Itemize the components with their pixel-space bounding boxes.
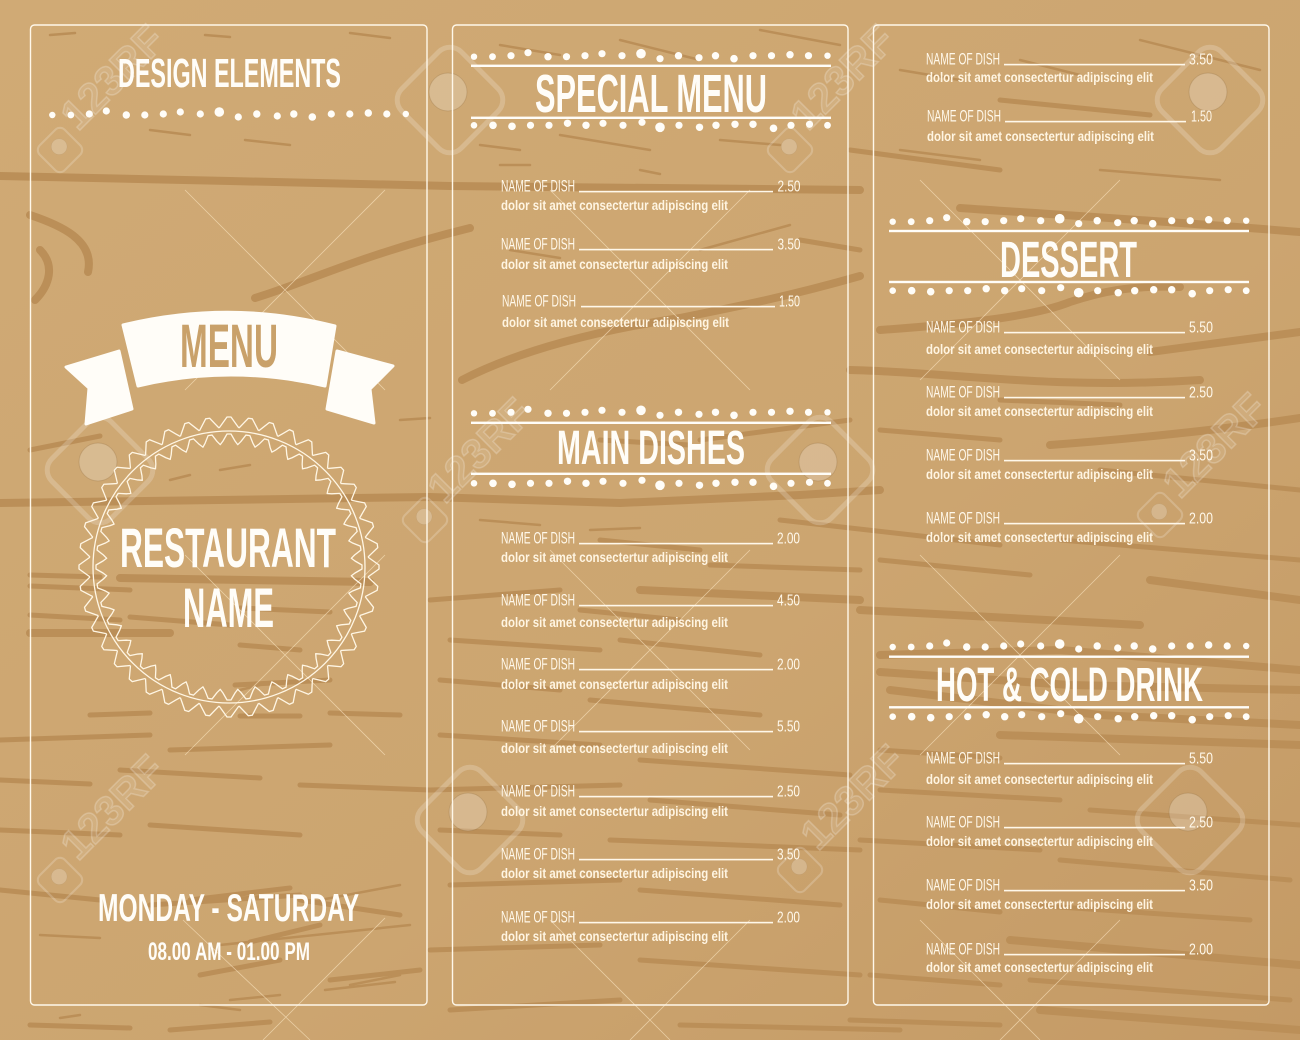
restaurant name <box>120 516 336 639</box>
ribbon label: MENU <box>180 312 278 380</box>
item: main dishes 4 <box>501 718 800 756</box>
item: main dishes 3: 2.00 <box>777 657 800 674</box>
item: continued 2: 1.50 <box>1191 109 1212 126</box>
item: special menu 1: NAME OF DISH <box>501 178 575 196</box>
heading: design elements: DESIGN ELEMENTS <box>118 50 341 96</box>
item: dessert 1: NAME OF DISH <box>926 319 1000 337</box>
section header: main dishes: MAIN DISHES <box>557 422 745 475</box>
item: special menu 2: NAME OF DISH <box>501 236 575 254</box>
item: main dishes 1 <box>501 530 800 565</box>
item: continued 2: NAME OF DISH <box>927 108 1001 126</box>
ribbon tails and band <box>66 312 393 424</box>
section header: special menu <box>471 49 831 132</box>
item: dessert 3: dolor sit amet consectertur adipiscing elit <box>926 466 1153 482</box>
item: drink 1: NAME OF DISH <box>926 750 1000 768</box>
item: main dishes 4: NAME OF DISH <box>501 718 575 736</box>
item: special menu 1: dolor sit amet consectertur adipiscing elit <box>501 197 728 213</box>
panel frame <box>30 25 427 1005</box>
item: main dishes 7: 2.00 <box>777 910 800 927</box>
item: drink 2: dolor sit amet consectertur adipiscing elit <box>926 833 1153 849</box>
item: drink 3: NAME OF DISH <box>926 877 1000 895</box>
item: drink 1: 5.50 <box>1189 751 1213 768</box>
item: dessert 2: dolor sit amet consectertur adipiscing elit <box>926 403 1153 419</box>
item: main dishes 5: dolor sit amet consectertur adipiscing elit <box>501 803 728 819</box>
item: continued 2 <box>927 108 1212 144</box>
section header: special menu: SPECIAL MENU <box>535 64 767 124</box>
item: main dishes 5: 2.50 <box>777 784 800 801</box>
item: drink 3: dolor sit amet consectertur adipiscing elit <box>926 896 1153 912</box>
item: continued 1: NAME OF DISH <box>926 51 1000 69</box>
item: main dishes 3: dolor sit amet consectertur adipiscing elit <box>501 676 728 692</box>
dotted divider <box>49 107 409 121</box>
watermark: stock logos: 123RF <box>418 389 541 511</box>
item: drink 3: 3.50 <box>1189 878 1213 895</box>
watermark: stock logos: 123RF <box>1153 384 1276 506</box>
item: drink 4 <box>926 941 1213 975</box>
item: special menu 3: 1.50 <box>779 294 800 311</box>
item: continued 2: dolor sit amet consectertur adipiscing elit <box>927 128 1154 144</box>
item: main dishes 1: 2.00 <box>777 531 800 548</box>
item: drink 1: dolor sit amet consectertur adipiscing elit <box>926 771 1153 787</box>
item: main dishes 6 <box>501 846 800 881</box>
item: main dishes 3 <box>501 656 800 692</box>
watermark: thin crossing lines <box>183 180 1120 1040</box>
item: main dishes 7 <box>501 909 800 944</box>
item: special menu 1 <box>501 178 801 213</box>
item: special menu 3: NAME OF DISH <box>502 293 576 311</box>
item: drink 2: NAME OF DISH <box>926 814 1000 832</box>
item: special menu 1: 2.50 <box>778 179 801 196</box>
item: drink 2 <box>926 814 1213 849</box>
item: dessert 4: 2.00 <box>1189 511 1213 528</box>
panel: middle column <box>452 25 848 1005</box>
watermark: stock logos: 123RF <box>781 16 904 138</box>
item: dessert 3 <box>926 447 1213 482</box>
item: main dishes 2: dolor sit amet consectertur adipiscing elit <box>501 614 728 630</box>
watermark: stock logos: 123RF <box>51 746 174 868</box>
round seal badge <box>79 417 379 717</box>
section header: main dishes <box>471 406 831 490</box>
ribbon banner <box>66 312 393 424</box>
item: dessert 4 <box>926 510 1213 545</box>
item: main dishes 1: dolor sit amet consectertur adipiscing elit <box>501 549 728 565</box>
item: main dishes 5: NAME OF DISH <box>501 783 575 801</box>
item: main dishes 3: NAME OF DISH <box>501 656 575 674</box>
item: continued 1 <box>926 51 1213 85</box>
item: main dishes 6: NAME OF DISH <box>501 846 575 864</box>
item: special menu 3: dolor sit amet consectertur adipiscing elit <box>502 314 729 330</box>
restaurant name: NAME <box>183 576 274 639</box>
panel: cover <box>30 25 427 1005</box>
item: main dishes 2: 4.50 <box>777 593 800 610</box>
panel: right column <box>874 25 1269 1005</box>
item: dessert 2: NAME OF DISH <box>926 384 1000 402</box>
item: special menu 2: dolor sit amet consectertur adipiscing elit <box>501 256 728 272</box>
item: main dishes 2: NAME OF DISH <box>501 592 575 610</box>
item: special menu 2 <box>501 236 801 272</box>
item: main dishes 6: dolor sit amet consectertur adipiscing elit <box>501 865 728 881</box>
item: main dishes 6: 3.50 <box>777 847 800 864</box>
item: dessert 2: 2.50 <box>1189 385 1213 402</box>
item: dessert 1: dolor sit amet consectertur adipiscing elit <box>926 341 1153 357</box>
item: main dishes 2 <box>501 592 800 630</box>
item: main dishes 1: NAME OF DISH <box>501 530 575 548</box>
item: drink 1 <box>926 750 1213 787</box>
item: dessert 3: 3.50 <box>1189 448 1213 465</box>
item: dessert 4: dolor sit amet consectertur adipiscing elit <box>926 529 1153 545</box>
item: special menu 2: 3.50 <box>778 237 801 254</box>
item: main dishes 4: dolor sit amet consectertur adipiscing elit <box>501 740 728 756</box>
panel frame <box>452 25 848 1005</box>
item: drink 4: dolor sit amet consectertur adipiscing elit <box>926 959 1153 975</box>
item: special menu 3 <box>502 293 800 330</box>
section header: dessert: DESSERT <box>1000 231 1137 288</box>
section header: dessert <box>889 214 1250 298</box>
opening hours: 08.00 AM - 01.00 PM <box>148 938 310 966</box>
item: drink 4: NAME OF DISH <box>926 941 1000 959</box>
item: drink 2: 2.50 <box>1189 815 1213 832</box>
item: dessert 2 <box>926 384 1213 419</box>
item: continued 1: 3.50 <box>1189 52 1213 69</box>
restaurant name: RESTAURANT <box>120 516 336 579</box>
watermark: stock logos: 123RF <box>791 736 914 858</box>
item: drink 3 <box>926 877 1213 912</box>
item: dessert 3: NAME OF DISH <box>926 447 1000 465</box>
item: main dishes 7: NAME OF DISH <box>501 909 575 927</box>
item: drink 4: 2.00 <box>1189 942 1213 959</box>
item: dessert 1: 5.50 <box>1189 320 1213 337</box>
panel frame <box>874 25 1269 1005</box>
item: continued 1: dolor sit amet consectertur adipiscing elit <box>926 69 1153 85</box>
section header: hot and cold drink <box>889 639 1250 724</box>
item: main dishes 5 <box>501 783 800 819</box>
item: dessert 1 <box>926 319 1213 357</box>
opening days: MONDAY - SATURDAY <box>98 887 359 930</box>
item: main dishes 4: 5.50 <box>777 719 800 736</box>
item: main dishes 7: dolor sit amet consectertur adipiscing elit <box>501 928 728 944</box>
item: dessert 4: NAME OF DISH <box>926 510 1000 528</box>
watermark: stock logos: 123RF <box>51 16 174 138</box>
